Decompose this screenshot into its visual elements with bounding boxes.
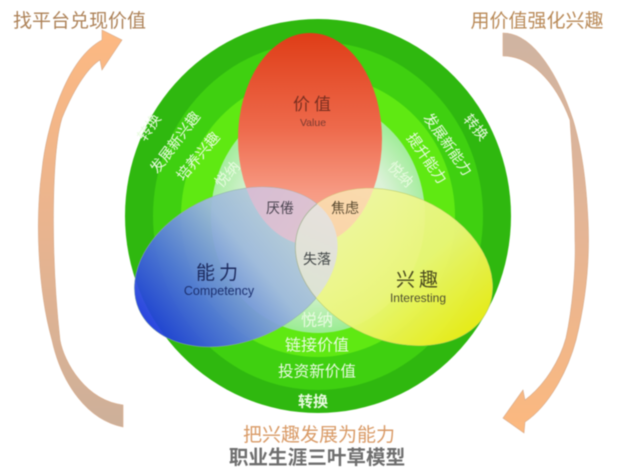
ring labels: bottom: 悦纳	[301, 312, 333, 330]
overlap labels: 焦虑	[331, 200, 359, 216]
interesting label	[390, 269, 446, 305]
overlap: competency and interesting	[294, 204, 338, 298]
value label: 价值	[293, 95, 335, 114]
ring labels: left side: 培养兴趣	[173, 129, 224, 184]
ring labels: right side: 转换	[460, 111, 492, 145]
ring labels: bottom: 转换	[298, 394, 328, 410]
label: bottom: 把兴趣发展为能力	[243, 424, 395, 446]
label: top left: 找平台兑现价值	[13, 10, 146, 32]
overlap labels: 失落	[303, 251, 331, 267]
ring labels: right side: 发展新能力	[420, 110, 475, 179]
ring labels: bottom: 投资新价值	[278, 362, 356, 380]
ring labels: bottom: 链接价值	[285, 336, 349, 354]
left arrow	[38, 30, 123, 427]
overlap labels: 厌倦	[266, 200, 294, 216]
overlap: value and interesting	[317, 188, 374, 237]
interesting label: 兴趣	[396, 269, 442, 291]
overlap: value and competency	[246, 186, 316, 243]
value label: Value	[300, 117, 326, 129]
petal: competency	[109, 157, 363, 377]
ring labels: left side: 发展新兴趣	[147, 109, 204, 177]
competency label: Competency	[184, 284, 255, 298]
interesting label: Interesting	[390, 291, 446, 305]
right arrow	[503, 33, 588, 433]
petal: interesting	[270, 158, 518, 376]
ring labels: left side: 悦纳	[212, 158, 244, 191]
ring labels: right side: 提升能力	[403, 130, 450, 187]
label: top right: 用价值强化兴趣	[470, 10, 604, 32]
title: 职业生涯三叶草模型	[229, 446, 405, 469]
value label	[293, 95, 335, 129]
petal: value	[238, 33, 382, 245]
ring labels: bottom	[278, 312, 356, 410]
ring labels: left side	[134, 109, 244, 191]
competency label	[184, 262, 255, 298]
ring labels: left side: 转换	[134, 111, 165, 144]
competency label: 能力	[196, 262, 242, 284]
ring labels: right side: 悦纳	[384, 158, 417, 191]
green rings	[125, 19, 511, 413]
ring labels: right side	[384, 110, 492, 191]
overlap labels	[266, 200, 359, 267]
